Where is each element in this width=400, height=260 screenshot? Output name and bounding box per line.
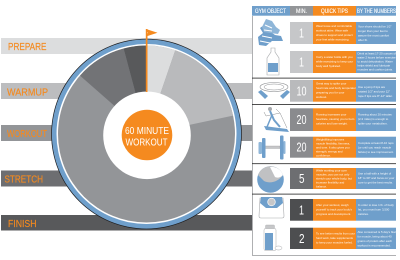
row: shoes: Your shoes should be 1/2" — [358, 24, 392, 28]
row: water bottle: Carry a water bottle with you — [316, 55, 353, 59]
icon: exercise ball — [257, 166, 284, 193]
row: scale: calories. — [358, 212, 369, 216]
band: prepare: PREPARE — [8, 42, 47, 53]
row: supplement jar: workout is recommended. — [358, 244, 391, 248]
row: dumbbell: Weightlifting improves — [316, 138, 345, 142]
row: supplement jar: for muscle, being about 40 — [358, 234, 392, 238]
row: shoes: workout attire. Wear safe — [316, 28, 348, 32]
row: water bottle: muscles and cushion joints. — [358, 68, 393, 72]
table header: MIN. — [296, 9, 307, 15]
row: jump rope: workout. — [316, 95, 327, 99]
row: treadmill: heartrate, causing you to burn — [316, 117, 355, 121]
row: supplement jar: 2 — [299, 232, 305, 246]
row: treadmill: (2-3 miles) is enough to — [358, 117, 389, 121]
row: scale: In order to lose 1 lb. of body — [358, 203, 394, 207]
flag marker — [146, 29, 158, 92]
center hole — [103, 92, 191, 179]
row: dumbbell: failure) to see improvement. — [358, 150, 394, 154]
row: scale — [259, 197, 396, 221]
row: exercise ball: 18" to 30" and focus on your — [358, 176, 394, 180]
row: scale: progress and development. — [316, 212, 351, 216]
center title: WORKOUT — [126, 138, 168, 148]
table header — [252, 6, 396, 16]
row: treadmill: Running about 20 minutes — [358, 112, 392, 116]
row: treadmill: calories and lose weight. — [316, 122, 348, 126]
row: water bottle — [267, 48, 396, 75]
row: dumbbell: (or until you reach muscle — [358, 146, 391, 150]
row: exercise ball: muscles, you can not only — [316, 172, 350, 176]
row: dumbbell: 20 — [296, 141, 307, 155]
center title — [122, 110, 172, 160]
row: shoes: 1 — [299, 26, 304, 40]
row: jump rope: rotated 1/2" and your 12" — [358, 90, 390, 94]
table header: QUICK TIPS — [321, 9, 348, 15]
row: jump rope — [258, 80, 396, 102]
band: finish — [1, 215, 252, 230]
band: workout — [1, 125, 252, 141]
row: jump rope: heart rate and body temperature, — [316, 86, 358, 90]
row: supplement jar: grams of protein after each — [358, 239, 392, 243]
row: treadmill: spike your metabolism. — [358, 122, 388, 126]
row: exercise ball — [257, 166, 396, 193]
row: dumbbell: Complete at least 8-10 reps — [358, 141, 394, 145]
icon: shoes — [258, 19, 283, 46]
wedge: warmup — [146, 50, 233, 134]
row: exercise ball: 5 — [299, 172, 305, 186]
icon: dumbbell — [258, 136, 286, 160]
icon: jump rope — [258, 82, 290, 99]
row: shoes — [258, 19, 396, 46]
row: shoes: assure the most comfort — [358, 34, 389, 38]
wedge: stretch — [80, 48, 146, 134]
center title: 60 MINUTE — [125, 126, 169, 137]
row: shoes: Wear loose and comfortable — [316, 24, 352, 28]
row: water bottle: water 2 hours before exercise — [358, 56, 396, 60]
row: treadmill — [264, 107, 396, 132]
icon: scale — [259, 197, 284, 218]
wedge: finish — [124, 45, 146, 134]
row: shoes: longer than your feet to — [358, 29, 388, 33]
table frame — [252, 16, 396, 256]
band: warmup: WARMUP — [7, 88, 48, 98]
row: water bottle: body well hydrated. — [316, 64, 341, 68]
band: finish: FINISH — [8, 219, 36, 230]
row: scale: After your workout, weigh — [316, 203, 349, 207]
band: stretch — [1, 170, 252, 186]
row: jump rope: Use a jump if tips are — [358, 85, 386, 89]
row: jump rope: Great way to spike your — [316, 82, 346, 86]
wedge: prepare — [146, 45, 175, 134]
row: exercise ball: increase flexibility and — [316, 180, 345, 184]
band: prepare — [1, 38, 252, 54]
row: dumbbell: confidence. — [316, 154, 331, 158]
row: exercise ball: balance. — [316, 184, 327, 188]
row: shoes: after fit. — [358, 38, 368, 42]
row: scale: yourself to track your body's — [316, 208, 352, 212]
band: workout: WORKOUT — [7, 129, 47, 140]
row: dumbbell: and tone. It also gives you — [316, 146, 350, 150]
row: supplement jar: hard work, take supplements — [316, 236, 354, 240]
band: stretch: STRETCH — [4, 174, 43, 186]
row: shoes: shoes to support and protect — [316, 33, 353, 37]
icon: treadmill — [264, 107, 289, 132]
row: scale: 1 — [299, 204, 304, 218]
donut chart: workout timeline — [51, 39, 242, 229]
row: water bottle: 1 — [299, 56, 304, 70]
table header: GYM OBJECT — [255, 9, 286, 15]
row: water bottle: while exercising to keep your — [316, 60, 353, 64]
row: supplement jar: to keep your muscles fueled. — [316, 240, 353, 244]
row: jump rope: 10 — [296, 84, 307, 98]
band: warmup — [1, 83, 252, 99]
row: treadmill: 20 — [296, 113, 307, 127]
row: jump rope: rope if tips are 8"-12" taller. — [358, 94, 393, 98]
row: dumbbell: muscle flexibility, firmness, — [316, 142, 350, 146]
row: treadmill: Running increases your — [316, 112, 346, 116]
row: dumbbell: strength, energy and — [316, 150, 343, 154]
row: water bottle: helps shield and lubricate — [358, 64, 391, 68]
row: water bottle: Drink at least 17-20 ounces of — [358, 52, 396, 56]
row: exercise ball: core to get the best results. — [358, 180, 393, 184]
row: supplement jar: Also consumed is 5 day's block — [358, 230, 398, 234]
row: supplement jar — [264, 225, 398, 250]
icon: water bottle — [267, 48, 279, 75]
row: shoes: your feet while exercising. — [316, 38, 349, 42]
icon: supplement jar — [264, 225, 282, 250]
row: exercise ball: stretch your whole body, but — [316, 176, 352, 180]
row: scale: fat, you must burn 3,500 — [358, 208, 390, 212]
row: jump rope: preparing you for your — [316, 90, 344, 94]
row: dumbbell — [258, 136, 396, 160]
row: water bottle: to avoid dehydration. Water — [358, 60, 393, 64]
row: supplement jar: To see better results from your — [316, 232, 355, 236]
row: exercise ball: While working your core — [316, 168, 347, 172]
row: exercise ball: Use a ball with a height of — [358, 172, 391, 176]
